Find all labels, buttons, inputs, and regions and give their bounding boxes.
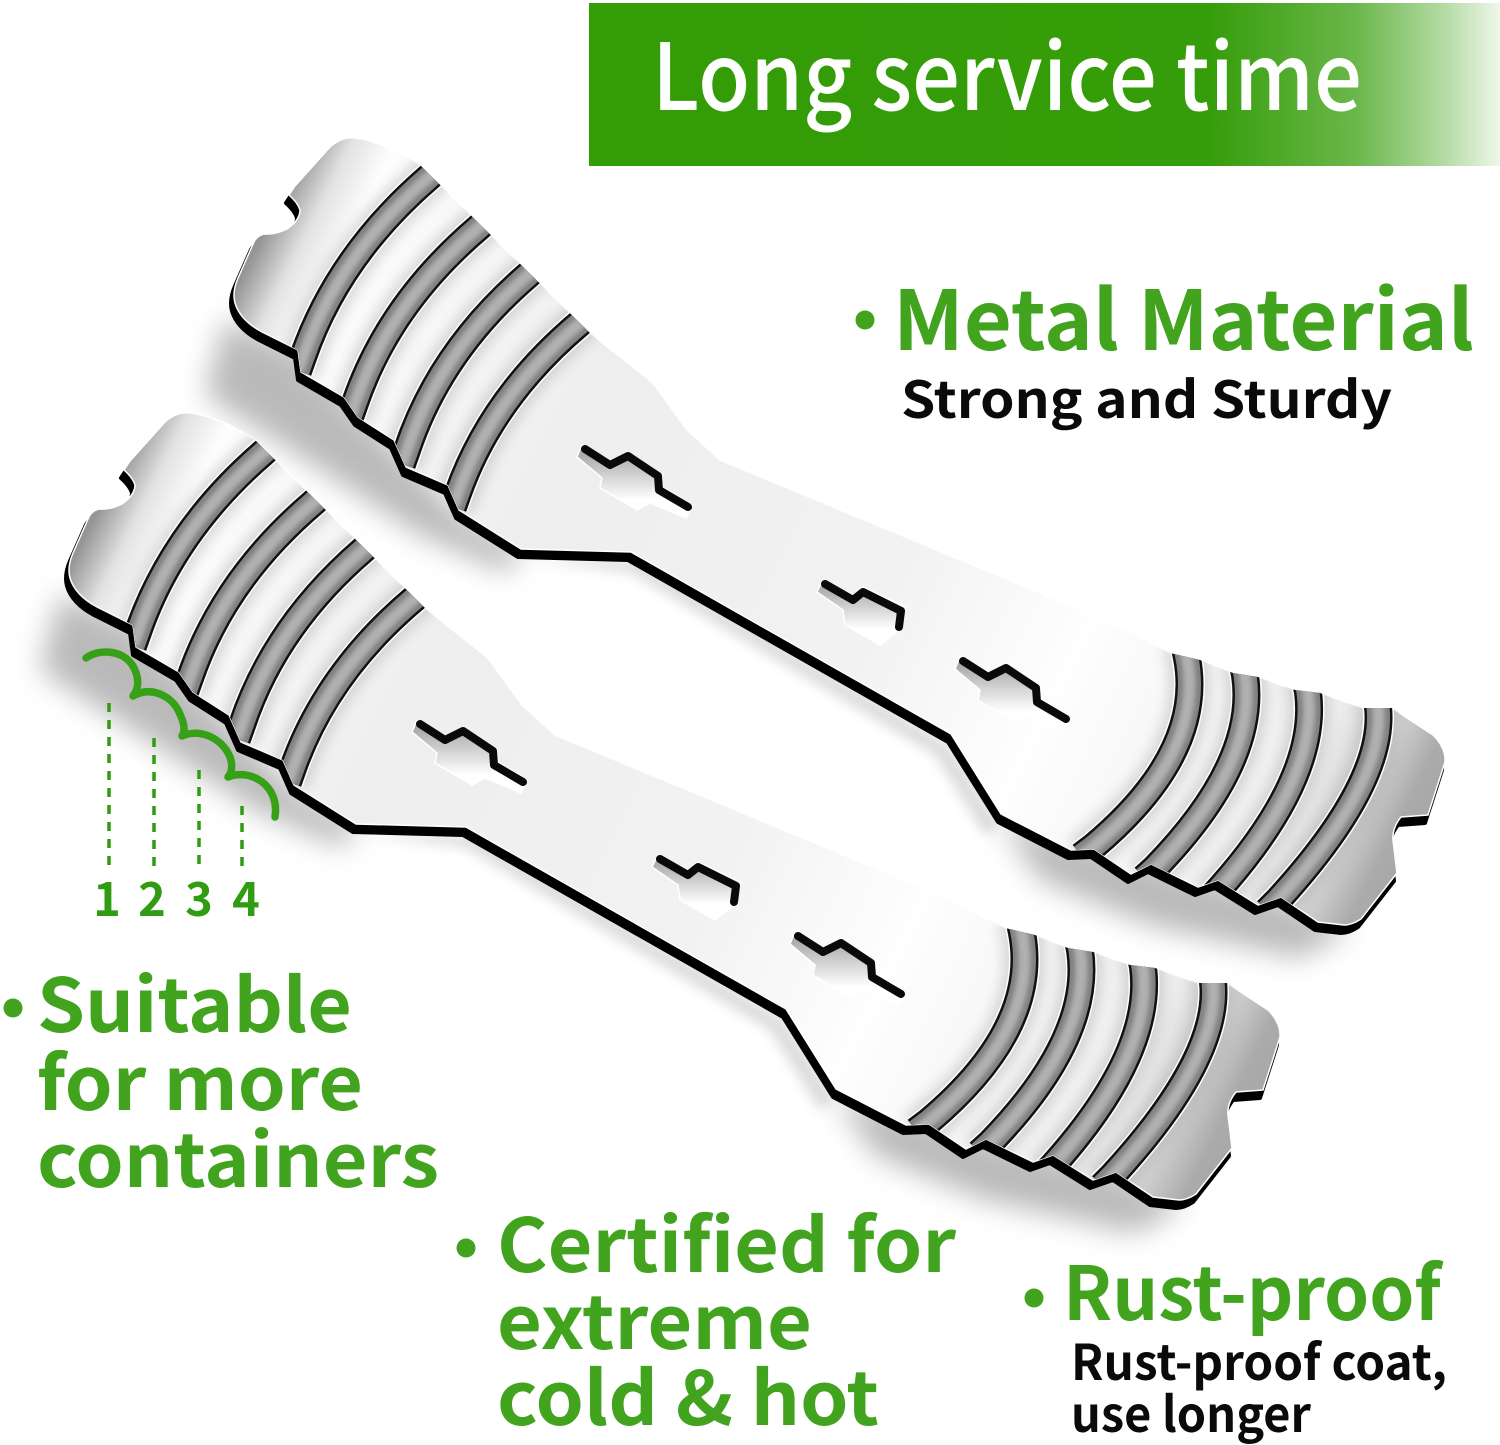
callout: certified for extreme cold and hot [456,1187,957,1445]
header banner [589,3,1500,166]
callout: suitable for more containers: Suitable [37,947,352,1054]
lower metal opener [40,413,1280,1233]
ridge numbers: 2 [138,861,166,930]
callout: metal material: Metal Material [893,255,1474,374]
opener shadow [40,595,1185,1233]
callout: certified for extreme cold and hot: extreme [497,1264,812,1371]
opener slots [577,445,1070,730]
callout: rust-proof: use longer [1071,1376,1312,1445]
ridge numbers [93,861,260,930]
ridge numbers: 1 [93,861,121,930]
upper metal opener [205,138,1445,958]
ridge numbers: 3 [185,861,213,930]
callout: suitable for more containers: for more [37,1025,363,1132]
opener black edge [231,146,1442,933]
callout: metal material [856,255,1474,433]
opener ridges [133,443,1214,1186]
opener slots [412,720,905,1005]
dashed guide lines [109,703,242,872]
callout: rust-proof: Rust-proof [1063,1235,1443,1342]
ridge count diagram [86,652,276,930]
callout: certified for extreme cold and hot: cold & hot [497,1340,879,1445]
callout: suitable for more containers [4,947,439,1209]
green scallop curve [86,652,276,817]
opener body [234,138,1445,925]
opener body [69,413,1280,1200]
callout: metal material: Strong and Sturdy [901,359,1392,433]
callout: rust-proof: Rust-proof coat, [1071,1324,1447,1395]
callout: rust-proof [1024,1235,1447,1445]
callout: certified for extreme cold and hot: Certified for [497,1187,957,1294]
title: Long service time [652,4,1362,137]
opener black edge [66,421,1277,1208]
opener shadow [205,320,1350,958]
opener ridges [298,168,1379,911]
callout: suitable for more containers: containers [37,1102,439,1209]
ridge numbers: 4 [232,861,260,930]
